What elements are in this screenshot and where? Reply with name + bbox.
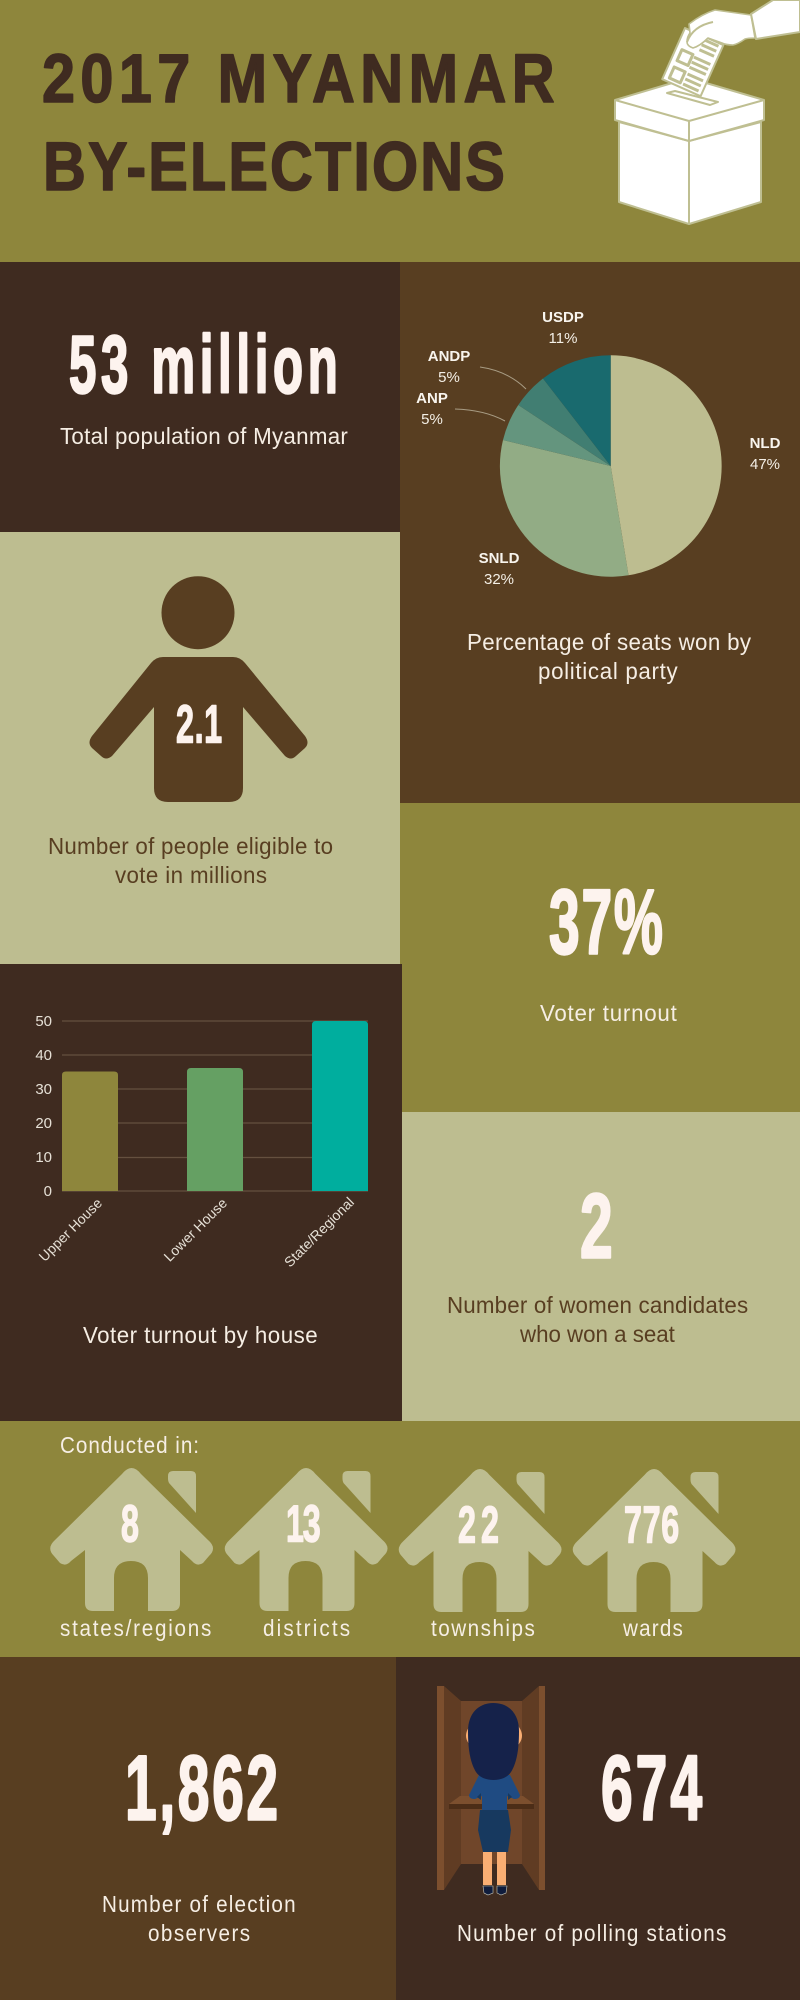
pie labels: 11%: [549, 330, 577, 347]
icon: voter in polling booth: [437, 1686, 545, 1895]
panel: total population: [0, 262, 400, 532]
caption: eligible voters: Number of people eligible to: [48, 832, 333, 859]
bar chart: [35, 1013, 368, 1270]
stats: house numbers: 8: [121, 1496, 139, 1554]
caption: women candidates: who won a seat: [519, 1320, 675, 1347]
pie chart: [500, 355, 722, 577]
icon: house 3: [399, 1469, 562, 1612]
labels: house captions: districts: [263, 1615, 350, 1641]
stat: 2: 2: [580, 1175, 613, 1278]
pie labels: 47%: [750, 456, 780, 473]
pie labels: [416, 309, 781, 588]
stat: 1,862: 1,862: [125, 1738, 278, 1840]
icon: person: [90, 576, 308, 802]
panel: polling stations: [396, 1657, 800, 2000]
icon: ballot box with hand: [615, 0, 800, 224]
caption: seats by party: Percentage of seats won by: [467, 628, 752, 655]
pie labels: ANP: [416, 390, 448, 407]
labels: house captions: [60, 1615, 683, 1641]
bar chart: 40: [35, 1047, 52, 1064]
pie labels: SNLD: [479, 550, 520, 567]
panel: conducted in: [0, 1421, 800, 1657]
stats: house numbers: 22: [458, 1497, 499, 1555]
pie labels: 5%: [438, 369, 460, 386]
bar chart: 20: [35, 1115, 52, 1132]
labels: house captions: states/regions: [60, 1615, 211, 1641]
caption: election observers: observers: [148, 1920, 250, 1946]
pie labels: 32%: [484, 571, 514, 588]
stat: 53 million: 53 million: [69, 320, 338, 411]
caption: election observers: Number of election: [102, 1891, 296, 1917]
icon: house 4: [573, 1469, 736, 1612]
stats: house numbers: 13: [286, 1496, 321, 1554]
caption: eligible voters: vote in millions: [115, 861, 267, 888]
icon: house 1: [50, 1468, 213, 1611]
labels: house captions: townships: [431, 1615, 535, 1641]
stat: 2.1: 2.1: [176, 695, 222, 755]
stat: 37%: 37%: [549, 871, 663, 974]
caption: eligible voters: [48, 832, 333, 888]
caption: seats by party: political party: [538, 657, 678, 684]
panel: voter turnout: [400, 803, 800, 1113]
caption: women candidates: [447, 1291, 748, 1347]
panel: seats by party: [400, 262, 800, 803]
icon: house 2: [225, 1468, 388, 1611]
pie labels: 5%: [421, 411, 443, 428]
caption: seats by party: [467, 628, 752, 684]
title: 2017 MYANMAR: [42, 40, 555, 117]
panel: turnout by house: [0, 964, 402, 1421]
bar chart: 0: [44, 1183, 52, 1200]
caption: turnout by house: Voter turnout by house: [83, 1321, 318, 1348]
panel: women candidates: [402, 1112, 800, 1421]
stats: house numbers: [121, 1496, 679, 1555]
heading: conducted in: Conducted in:: [60, 1432, 199, 1458]
title: BY-ELECTIONS: [43, 128, 505, 205]
labels: house captions: wards: [622, 1615, 683, 1641]
bar chart: 30: [35, 1081, 52, 1098]
stat: 674: 674: [601, 1738, 702, 1840]
caption: polling stations: Number of polling stations: [457, 1920, 726, 1946]
bar chart: 50: [35, 1013, 52, 1030]
bar chart: Lower House: [160, 1195, 230, 1264]
panel: eligible voters: [0, 532, 400, 964]
bar chart: 10: [35, 1149, 52, 1166]
pie labels: ANDP: [428, 348, 470, 365]
pie labels: NLD: [750, 435, 781, 452]
caption: election observers: [102, 1891, 296, 1946]
bar chart: Upper House: [35, 1195, 105, 1264]
stats: house numbers: 776: [624, 1497, 679, 1555]
caption: voter turnout: Voter turnout: [540, 999, 677, 1026]
panel: header: [0, 0, 800, 263]
caption: total population: Total population of Myanmar: [60, 422, 348, 449]
panel: election observers: [0, 1657, 396, 2000]
caption: women candidates: Number of women candidates: [447, 1291, 748, 1318]
pie labels: USDP: [542, 309, 584, 326]
bar chart: State/Regional: [281, 1194, 357, 1270]
title: [42, 40, 555, 205]
